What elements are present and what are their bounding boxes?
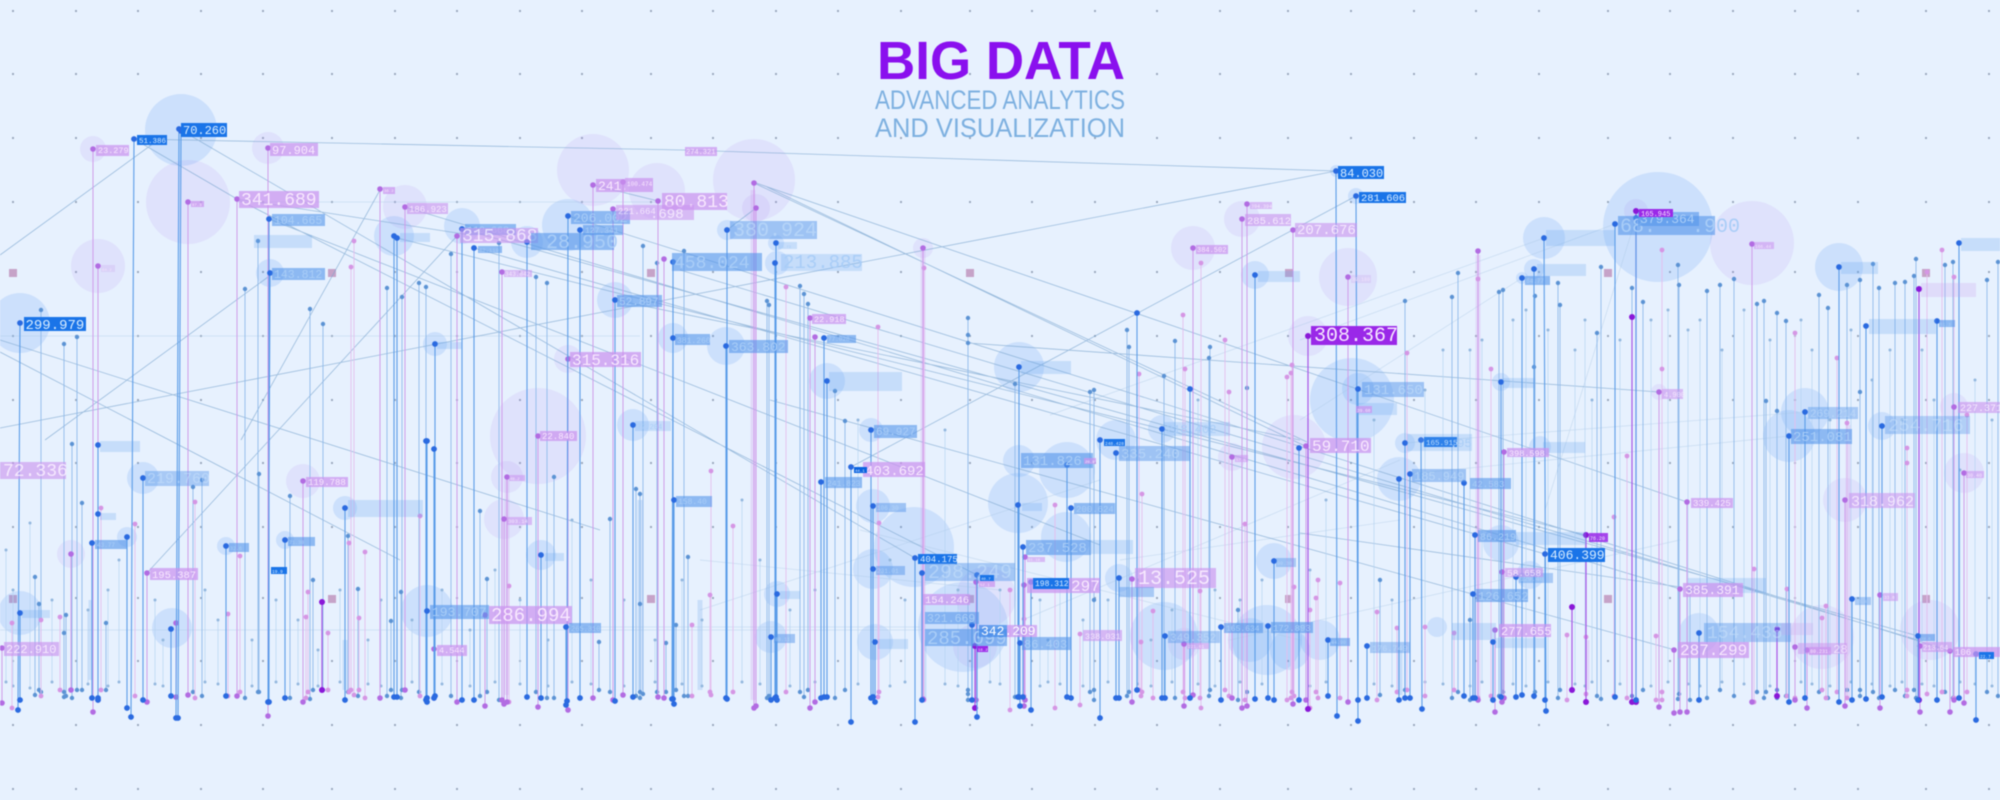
label small: 64.2 <box>102 269 112 273</box>
label small: 43.77 <box>97 542 115 549</box>
label small: 22.7 <box>1980 654 1991 660</box>
label small: 76.20 <box>1590 536 1605 542</box>
label 335.xx: 335.240 <box>1121 447 1180 463</box>
label hidden value <box>583 225 623 236</box>
label 77.028: 77.028 <box>828 336 850 343</box>
label small <box>1356 406 1372 414</box>
label 154.246: 154.246 <box>925 595 969 607</box>
label small: 16.2 <box>978 649 988 653</box>
label 13.525: 13.525 <box>1138 568 1210 591</box>
label 380.924: 380.924 <box>733 220 817 243</box>
label 86.xx: 86.403 <box>1024 638 1067 652</box>
label small <box>1187 643 1209 650</box>
label small <box>1027 557 1045 563</box>
label 343.842: 343.842 <box>505 271 531 278</box>
label small <box>1855 597 1871 605</box>
label small pink <box>509 475 525 482</box>
label 106 <box>1953 647 2000 658</box>
data labels group <box>0 123 2000 660</box>
label small: 33.0 <box>1884 595 1895 601</box>
label 165.634: 165.634 <box>1226 625 1260 634</box>
label small <box>876 566 905 575</box>
label small <box>1351 275 1371 283</box>
subtitle: ADVANCED ANALYTICS <box>875 85 1125 115</box>
label 321.669: 321.669 <box>927 613 975 626</box>
label small <box>191 201 204 208</box>
label small: 87.3 <box>192 204 202 208</box>
label 248.428: 248.428 <box>1105 441 1124 447</box>
label 119.668: 119.668 <box>467 226 509 237</box>
label small: 28.6 <box>1921 638 1931 642</box>
label small: 100.474 <box>627 181 653 188</box>
label small <box>1966 471 1984 479</box>
strong pink stems <box>2 148 1964 716</box>
label 404.175: 404.175 <box>920 555 958 565</box>
label small: 64.77 <box>1526 278 1544 285</box>
label 198.312: 198.312 <box>1035 580 1069 589</box>
label 4.900: 4.900 <box>1664 392 1685 400</box>
label pale pink <box>1781 623 1813 635</box>
label 339.425: 339.425 <box>1693 499 1731 509</box>
label small <box>980 575 994 582</box>
label 379.364: 379.364 <box>1640 212 1695 227</box>
label faded <box>1407 434 1472 451</box>
label hidden value <box>635 421 671 432</box>
label 237.528: 237.528 <box>1028 541 1087 557</box>
label small <box>977 646 988 653</box>
label 106: 106 <box>1955 648 1971 658</box>
label small: 19.9 <box>272 569 283 575</box>
label 80.813: 80.813 <box>664 193 729 213</box>
label 248.428 <box>1104 439 1125 447</box>
label 165.915: 165.915 <box>1426 440 1458 448</box>
label 458.024: 458.024 <box>674 254 750 274</box>
label small <box>774 634 795 643</box>
label 172.xx: 172.893 <box>1273 624 1311 634</box>
label small <box>1883 593 1898 601</box>
label small pink: 57.3 <box>1236 459 1246 463</box>
label 308.367: 308.367 <box>1314 325 1398 348</box>
label 126.652: 126.652 <box>1478 590 1528 604</box>
label small pink: 48.2 <box>510 478 520 482</box>
label small: 231.01 <box>877 568 899 575</box>
label 143.812: 143.812 <box>274 269 322 282</box>
label 341.689: 341.689 <box>241 191 317 211</box>
title: BIG DATA: BIG DATA <box>877 31 1125 91</box>
label 221.664: 221.664 <box>618 207 656 217</box>
label 119.668 <box>465 224 516 237</box>
label 269.xx: 269.214 <box>1810 409 1857 421</box>
label 265.xx <box>569 623 601 634</box>
label 52.897: 52.897 <box>619 297 659 309</box>
label 398.598: 398.598 <box>1509 449 1545 459</box>
label 186.923: 186.923 <box>409 205 447 215</box>
label small <box>876 503 906 512</box>
label 68.xx: 68. .900 <box>1620 216 1740 239</box>
label small: 40.7 <box>981 578 991 582</box>
label 42.xx <box>1470 478 1511 490</box>
strong blue stems <box>18 129 1976 722</box>
label small <box>1330 638 1350 646</box>
subtitle: AND VISUALIZATION <box>875 113 1125 143</box>
label 221.664 <box>616 205 694 223</box>
label small: 32.6 <box>230 546 242 552</box>
label small pink: 20.8 <box>1085 461 1095 465</box>
label small: 15.4 <box>1856 599 1867 605</box>
label 23.279: 23.279 <box>98 146 129 156</box>
label 154.435: 154.435 <box>1707 624 1783 644</box>
label 84.030: 84.030 <box>1340 167 1383 181</box>
label small <box>288 537 315 546</box>
label 403.692: 403.692 <box>865 464 924 480</box>
label small: 44.1 <box>855 470 865 474</box>
label 265.xx: 265.310 <box>571 626 600 634</box>
label small: 36.2 <box>384 190 394 194</box>
label 165.915 <box>1424 437 1458 448</box>
label 285.612: 285.612 <box>1247 216 1291 228</box>
label small <box>778 242 797 250</box>
label small: 39.60 <box>1357 408 1371 414</box>
label small <box>1809 647 1831 655</box>
label 22.840: 22.840 <box>542 432 574 442</box>
label 281.606: 281.606 <box>1361 193 1405 205</box>
label small <box>95 540 127 549</box>
label small: 71.30 <box>289 540 304 546</box>
label 206.002: 206.002 <box>573 211 628 226</box>
label small <box>1276 558 1296 567</box>
label 349.xx: 349.352 <box>1170 633 1216 645</box>
label 384.502: 384.502 <box>1197 247 1226 255</box>
label 86.219: 86.219 <box>1480 533 1516 544</box>
label small <box>854 467 867 474</box>
label small <box>1525 276 1550 285</box>
label small <box>229 543 249 552</box>
label 219.xx: 219.760 <box>147 471 210 488</box>
label 200.xx: 200.624 <box>1076 505 1114 515</box>
label 297: 297 <box>1071 578 1100 596</box>
label 381.xx: 381.260 <box>677 337 711 346</box>
label 193.707: 193.707 <box>432 605 487 620</box>
label 69.927: 69.927 <box>876 427 916 439</box>
wide translucent stems <box>91 190 1848 700</box>
label small: 88.11 <box>775 637 790 643</box>
label small <box>101 265 115 273</box>
label hidden value: 62.119 <box>479 247 499 254</box>
label 119.788: 119.788 <box>308 478 346 488</box>
label small <box>676 496 712 507</box>
label 104.665: 104.665 <box>274 215 322 228</box>
label 241.82 <box>825 477 862 489</box>
label small <box>383 187 395 194</box>
label 222.910: 222.910 <box>6 643 56 657</box>
label 51.386 <box>137 135 167 146</box>
label 97.904: 97.904 <box>272 144 315 158</box>
label 318.962: 318.962 <box>1851 494 1914 511</box>
label 165.945: 165.945 <box>1641 211 1670 219</box>
label 286.994: 286.994 <box>491 605 571 627</box>
label 241: 241. <box>598 179 629 194</box>
label 128 <box>1798 643 1848 657</box>
label 72.336: 72.336 <box>3 462 68 482</box>
label 213.6: 213.64 <box>1923 645 1948 653</box>
label 385.391: 385.391 <box>1685 583 1740 598</box>
blue bubbles <box>0 94 1896 675</box>
label small: 158.40 <box>678 498 707 507</box>
connecting lines, pale <box>0 202 1805 640</box>
label small: 39.180 <box>1352 277 1370 283</box>
label 299.979: 299.979 <box>26 318 84 334</box>
label 59.710: 59.710 <box>1312 438 1370 456</box>
label 4.544: 4.544 <box>439 646 465 656</box>
label small: 166.44 <box>1755 244 1772 250</box>
label 285.099: 285.099 <box>927 628 1007 650</box>
faint blue stems <box>6 310 1992 688</box>
medium blue stems <box>35 241 1998 700</box>
label pale pink <box>1921 283 1976 297</box>
label small: 80.231 <box>1810 649 1828 655</box>
label small: 221.61 <box>1188 644 1205 650</box>
label 315.868: 315.868 <box>462 227 538 247</box>
label small: 44.90 <box>1331 640 1346 646</box>
label hidden value: 127.341 <box>585 227 619 236</box>
label small <box>1939 320 1955 328</box>
label small <box>271 567 287 575</box>
deep purple stems <box>322 211 1919 709</box>
label 213.6 <box>1922 642 1952 653</box>
label 406.399: 406.399 <box>1550 548 1605 563</box>
label wide faded: 254.716 <box>1888 417 1964 437</box>
label 131.xx left: 131.826 <box>1023 454 1082 470</box>
label 131.xx: 131.650 <box>1364 383 1423 399</box>
label small pink <box>1084 458 1096 465</box>
label faded: .95 <box>1450 437 1472 451</box>
label 213.385: 213.885 <box>783 252 863 274</box>
label 51.386: 51.386 <box>139 138 167 146</box>
label 297 <box>1027 578 1100 596</box>
square markers <box>9 269 1930 603</box>
label small <box>1920 634 1935 642</box>
label 185.xx: 185.949 <box>1414 470 1464 484</box>
label 4.900 <box>1662 389 1685 400</box>
label faded <box>1119 587 1154 597</box>
subtitle <box>875 85 1125 143</box>
label 274.321: 274.321 <box>686 149 715 157</box>
label 42.xx: 42.583 <box>1472 480 1504 490</box>
label small: 90.30 <box>1277 561 1292 567</box>
label 22.918: 22.918 <box>814 315 845 325</box>
label 338.031: 338.031 <box>1085 632 1121 642</box>
label small <box>1589 533 1608 542</box>
label 241.82: 241.823 <box>827 480 861 489</box>
label 128: .28 <box>1826 643 1848 657</box>
label small: 51.3 <box>1940 322 1951 328</box>
label small: 394.394 <box>1251 204 1272 210</box>
label hidden value: 218.402 <box>1166 423 1216 437</box>
label small: 52.1 <box>980 584 990 588</box>
connecting lines, strong <box>0 129 1950 651</box>
label 315.316: 315.316 <box>572 352 639 370</box>
label small pink: 303.14 <box>508 518 529 525</box>
label 165.945 <box>1639 209 1673 219</box>
label 195.387: 195.387 <box>152 570 196 582</box>
pink bubbles <box>57 132 1984 669</box>
label small: 61.18 <box>1028 559 1041 563</box>
label 342.209: 342.209 <box>981 624 1036 639</box>
label small pink <box>507 517 532 525</box>
label 176.749: 176.749 <box>1372 644 1408 654</box>
label 277.655: 277.655 <box>1501 625 1551 639</box>
label 251.081: 251.081 <box>1793 430 1852 446</box>
label hidden value: 77.204 <box>637 424 662 432</box>
label small: 106.30 <box>877 505 899 512</box>
label 287.299: 287.299 <box>1680 642 1747 660</box>
label small pink <box>1235 455 1248 463</box>
label hidden value: 129.40 <box>1520 576 1544 583</box>
label small <box>979 581 995 588</box>
label small <box>1754 242 1774 250</box>
label 28.950: 28.950 <box>534 232 618 255</box>
label 70.260: 70.260 <box>183 124 226 138</box>
label 77.028 <box>827 335 856 343</box>
label small: 18.73 <box>779 246 792 250</box>
label hidden value <box>1519 573 1553 583</box>
label 221.664: .698 <box>650 207 684 223</box>
label small <box>1979 652 1994 660</box>
label 363.802: 363.802 <box>731 340 786 355</box>
label 207.676: 207.676 <box>1297 223 1356 239</box>
label small <box>625 178 653 192</box>
label 58.658: 58.658 <box>1507 568 1542 579</box>
label small: 30.40 <box>1967 473 1982 479</box>
pale pink stems <box>12 241 1967 710</box>
label 298.249: 298.249 <box>928 562 1012 585</box>
